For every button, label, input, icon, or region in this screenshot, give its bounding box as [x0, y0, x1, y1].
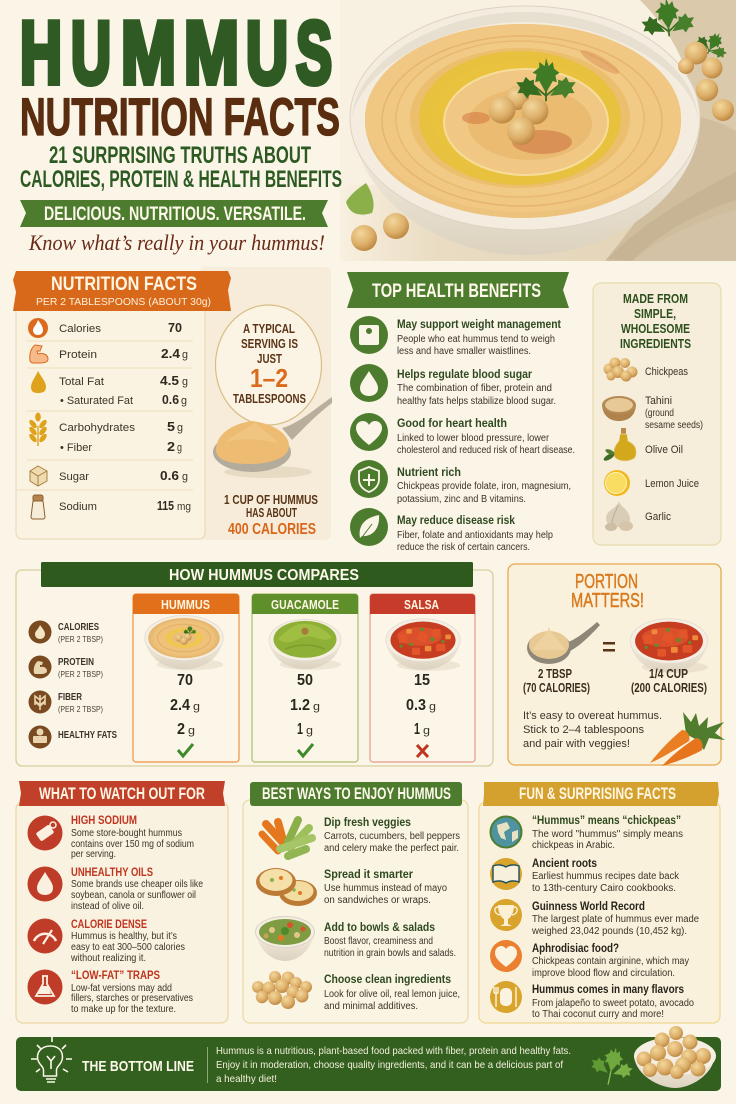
values: [406, 672, 436, 738]
advice text: [523, 710, 662, 750]
benefit: blood sugar: Helps regulate blood sugar: [397, 369, 532, 381]
heading: MADE FROM: [623, 291, 688, 306]
cloth napkin: [605, 117, 736, 261]
values: g: [313, 701, 320, 713]
warning: calorie dense: [28, 918, 185, 964]
heading: PORTION: [575, 571, 638, 593]
warning: low-fat traps: [28, 970, 193, 1015]
chickpeas on top: [488, 86, 548, 145]
callout: typical serving: TABLESPOONS: [233, 392, 306, 406]
amounts: (70 CALORIES): [523, 681, 590, 695]
row: sugar: [59, 468, 188, 483]
parsley sprig small: [693, 25, 734, 62]
label: healthy fats: HEALTHY FATS: [58, 730, 117, 741]
icon: wheat: [28, 412, 48, 446]
banner: HOW HUMMUS COMPARES: [169, 567, 359, 584]
panel: top health benefits: [347, 272, 575, 553]
values: 2: [177, 721, 185, 738]
subtitle: 21 SURPRISING TRUTHS ABOUT: [49, 142, 311, 169]
advice text: and pair with veggies!: [523, 738, 630, 750]
note: one cup has 400 calories: 400 CALORIES: [228, 521, 316, 538]
note: one cup has 400 calories: HAS ABOUT: [246, 506, 297, 520]
values: 2.4: [170, 697, 190, 714]
panel: portion matters: [508, 564, 725, 766]
green chickpea pod: [346, 183, 374, 215]
ingredient: garlic: [605, 501, 671, 531]
heading: INGREDIENTS: [620, 336, 691, 351]
banner: FUN & SURPRISING FACTS: [519, 785, 676, 803]
panel: best ways to enjoy hummus: [243, 782, 468, 1023]
panel: ingredients: [593, 283, 721, 545]
row: saturated fat: g: [181, 395, 187, 407]
subtitle: CALORIES, PROTEIN & HEALTH BENEFITS: [20, 166, 342, 193]
serving side panel background: [200, 267, 331, 540]
warning: unhealthy oils: Some brands use cheaper oils like: [71, 879, 203, 890]
banner: nutrition facts: [13, 271, 231, 311]
heading: SIMPLE,: [634, 306, 676, 321]
idea: spread: on sandwiches or wraps.: [324, 895, 431, 906]
fact: flavors: Hummus comes in many flavors: [532, 984, 684, 996]
row: sugar: 0.6: [160, 468, 179, 483]
warning: low-fat traps: Low-fat versions may add: [71, 983, 172, 994]
check mark: [298, 744, 313, 756]
fact: ancient roots: Earliest hummus recipes date back: [532, 871, 679, 882]
icon: muscle: [30, 345, 48, 363]
summary text: [207, 1045, 571, 1085]
warning: unhealthy oils: instead of olive oil.: [71, 901, 144, 912]
idea: bowls: [256, 916, 456, 961]
values: 1.2: [290, 697, 310, 714]
warning: low-fat traps: fillers, starches or preservatives: [71, 993, 193, 1004]
idea: veggies: and celery make the perfect pair.: [324, 843, 459, 854]
benefit: heart: cholesterol and reduced risk of heart disease.: [397, 445, 575, 456]
heading: THE BOTTOM LINE: [82, 1058, 194, 1075]
warning: low-fat traps: to make up for the texture.: [71, 1004, 176, 1015]
fact: flavors: From jalapeño to sweet potato, avocado: [532, 998, 695, 1009]
callout: typical serving: SERVING IS: [241, 337, 298, 351]
banner: [347, 272, 569, 308]
benefit: weight: People who eat hummus tend to weigh: [397, 334, 555, 345]
spoon: [527, 622, 600, 664]
values: [290, 672, 320, 738]
note: one cup has 400 calories: [224, 493, 318, 538]
nutrition table: [16, 300, 205, 539]
cross mark: [417, 745, 428, 757]
ingredient: chickpeas: [604, 358, 688, 382]
row: carbohydrates: [59, 419, 183, 434]
ingredient: tahini: [602, 395, 703, 431]
tagline: Know what’s really in your hummus!: [28, 230, 325, 255]
panel: what to watch out for: [16, 781, 228, 1023]
icon: sugar cube: [30, 466, 47, 486]
title: hummus: U: [71, 3, 111, 102]
row: protein: g: [182, 349, 188, 361]
label: fiber: [28, 690, 103, 714]
ingredient: tahini: Tahini: [645, 395, 672, 407]
title: hummus: [20, 3, 332, 102]
header: HUMMUS: [161, 597, 210, 612]
warning: unhealthy oils: [28, 866, 203, 912]
heading: [620, 291, 691, 351]
row: calories: 70: [168, 320, 182, 335]
hummus surface: [365, 24, 681, 218]
heading: WHOLESOME: [621, 321, 690, 336]
fact: world record: The largest plate of hummus ever made: [532, 914, 700, 925]
spoon with hummus: [213, 397, 332, 478]
benefit: nutrient: Nutrient rich: [397, 467, 461, 479]
label: fiber: (PER 2 TBSP): [58, 705, 103, 714]
banner: [19, 781, 225, 806]
idea: bowls: Add to bowls & salads: [324, 922, 435, 934]
row: fiber: g: [177, 442, 182, 454]
banner: [41, 562, 473, 587]
values: [170, 672, 200, 738]
benefit: heart: [350, 413, 575, 456]
ingredient: lemon: [604, 470, 699, 496]
ingredient: olive oil: [603, 428, 683, 462]
benefit: nutrient: Chickpeas provide folate, iron, magnesium,: [397, 481, 571, 492]
panel: fun and surprising facts: [479, 782, 720, 1023]
title: hummus: S: [296, 3, 332, 102]
warning: unhealthy oils: UNHEALTHY OILS: [71, 867, 153, 879]
fact: ancient roots: [490, 858, 679, 894]
ingredient: tahini: sesame seeds): [645, 420, 703, 431]
banner: [250, 782, 462, 806]
row: sodium: 115: [157, 498, 174, 513]
row labels: [28, 620, 117, 748]
row: total fat: 4.5: [160, 373, 179, 388]
icon: oil drop: [31, 371, 46, 393]
title: nutrition facts: NUTRITION FACTS: [20, 88, 340, 147]
benefit: heart: Linked to lower blood pressure, lower: [397, 433, 550, 444]
idea: ingredients: and minimal additives.: [324, 1001, 418, 1012]
label: calories: CALORIES: [58, 622, 99, 633]
warning: high sodium: HIGH SODIUM: [71, 815, 137, 827]
header: [252, 594, 358, 614]
row: fiber: [60, 439, 182, 454]
header: [370, 594, 475, 614]
amounts: (200 CALORIES): [631, 681, 707, 695]
benefit: heart: Good for heart health: [397, 418, 507, 430]
hero: bowl of hummus: [340, 0, 736, 261]
banner: TOP HEALTH BENEFITS: [372, 281, 541, 302]
title: hummus: H: [20, 3, 62, 102]
fact: aphrodisiac: [490, 940, 689, 979]
benefit: blood sugar: healthy fats helps stabilize blood sugar.: [397, 396, 556, 407]
icon: flame: [28, 318, 48, 338]
row: sodium: [59, 498, 191, 513]
label: protein: (PER 2 TBSP): [58, 670, 103, 679]
fact: ancient roots: Ancient roots: [532, 858, 597, 870]
values: 1: [297, 721, 303, 738]
subtitle: [20, 142, 342, 193]
fact: meaning: “Hummus” means “chickpeas”: [532, 815, 681, 827]
idea: veggies: [262, 817, 460, 856]
row: calories: [59, 320, 182, 335]
bowl image: [386, 619, 460, 671]
benefit: weight: less and have smaller waistlines.: [397, 346, 531, 357]
values: g: [306, 725, 313, 737]
idea: spread: [256, 868, 448, 906]
amounts: [523, 667, 707, 695]
ingredient: lemon: Lemon Juice: [645, 478, 699, 490]
heading: [571, 571, 644, 612]
summary text: Enjoy it in moderation, choose quality ingredients, and it can be a delicious part of: [216, 1059, 563, 1071]
benefit: disease risk: [350, 508, 554, 553]
summary text: Hummus is a nutritious, plant-based food packed with fiber, protein and healthy fats.: [216, 1045, 571, 1057]
warning: low-fat traps: “LOW-FAT” TRAPS: [71, 970, 160, 982]
heading: MATTERS!: [571, 590, 644, 612]
banner: [483, 782, 719, 806]
callout: typical serving: 1–2: [250, 363, 288, 393]
warning: high sodium: Some store-bought hummus: [71, 828, 182, 839]
row: carbohydrates: g: [177, 422, 183, 434]
benefit: disease risk: reduce the risk of certain cancers.: [397, 542, 530, 553]
salsa bowl: [630, 619, 708, 673]
row: sodium: mg: [177, 501, 191, 513]
scattered chickpeas: [351, 42, 734, 251]
idea: spread: Spread it smarter: [324, 869, 413, 881]
row: saturated fat: • Saturated Fat: [60, 395, 133, 407]
label: calories: (PER 2 TBSP): [58, 635, 103, 644]
ingredient: olive oil: Olive Oil: [645, 444, 683, 456]
panel: the bottom line: [16, 1026, 721, 1091]
summary text: a healthy diet!: [216, 1073, 277, 1085]
row: sodium: Sodium: [59, 501, 97, 513]
advice text: It’s easy to overeat hummus.: [523, 710, 662, 722]
column: salsa: [370, 594, 475, 762]
fact: meaning: chickpeas in Arabic.: [532, 840, 615, 851]
values: 50: [297, 672, 313, 689]
row: total fat: Total Fat: [59, 376, 104, 388]
ingredient: tahini: (ground: [645, 408, 674, 419]
label: protein: [28, 656, 103, 679]
banner: WHAT TO WATCH OUT FOR: [39, 785, 205, 803]
row: total fat: [59, 373, 188, 388]
panel: nutrition facts: [13, 267, 332, 540]
benefit: nutrient: [350, 460, 571, 505]
header: GUACAMOLE: [271, 597, 339, 612]
ingredient: garlic: Garlic: [645, 511, 671, 523]
row: sugar: Sugar: [59, 471, 89, 483]
amounts: 2 TBSP: [538, 667, 572, 681]
banner: nutrition facts: PER 2 TABLESPOONS (ABOUT 30g): [36, 296, 211, 308]
parsley sprig top right: [640, 0, 696, 39]
label: protein: PROTEIN: [58, 657, 94, 668]
values: 70: [177, 672, 193, 689]
idea: veggies: Dip fresh veggies: [324, 817, 411, 829]
icon: salt shaker: [31, 495, 45, 519]
idea: ingredients: Choose clean ingredients: [324, 974, 451, 986]
fact: meaning: The word "hummus" simply means: [532, 829, 683, 840]
ingredient: chickpeas: Chickpeas: [645, 366, 688, 378]
row: sugar: g: [182, 471, 188, 483]
fact: flavors: [490, 981, 695, 1020]
fact: aphrodisiac: Chickpeas contain arginine, which may: [532, 956, 689, 967]
title: hummus: M: [121, 3, 176, 102]
benefit: weight: [350, 316, 561, 357]
title: hummus: M: [184, 3, 239, 102]
row: fiber: 2: [167, 439, 175, 454]
fact: world record: Guinness World Record: [532, 901, 645, 913]
warning: calorie dense: easy to eat 300–500 calories: [71, 942, 185, 953]
row: protein: Protein: [59, 349, 97, 361]
label: calories: [28, 620, 103, 644]
warning: high sodium: [28, 815, 194, 860]
warning: high sodium: contains over 150 mg of sodium: [71, 839, 194, 850]
fact: meaning: [490, 815, 683, 851]
warning: calorie dense: Hummus is healthy, but it’s: [71, 931, 177, 942]
benefit: disease risk: Fiber, folate and antioxidants may help: [397, 530, 554, 541]
row: fiber: • Fiber: [60, 442, 92, 454]
bowl image: [269, 620, 341, 670]
values: 0.3: [406, 697, 426, 714]
icon: carrots: [650, 712, 725, 766]
fact: flavors: to Thai coconut curry and more!: [532, 1009, 664, 1020]
banner: nutrition facts: NUTRITION FACTS: [51, 274, 197, 295]
header: [133, 594, 239, 614]
row: carbohydrates: 5: [167, 419, 175, 434]
benefit: blood sugar: [350, 364, 556, 407]
row: protein: 2.4: [161, 346, 181, 361]
values: g: [193, 701, 200, 713]
values: g: [188, 725, 195, 737]
ribbon: delicious nutritious versatile: [20, 200, 328, 227]
note: one cup has 400 calories: 1 CUP OF HUMMUS: [224, 493, 318, 507]
benefit: weight: May support weight management: [397, 319, 561, 331]
panel: how hummus compares: [16, 562, 493, 766]
values: 15: [414, 672, 430, 689]
idea: ingredients: [252, 971, 460, 1012]
label: fiber: FIBER: [58, 692, 83, 703]
row: saturated fat: [60, 392, 187, 407]
fact: ancient roots: to 13th-century Cairo cookbooks.: [532, 883, 676, 894]
icon: light bulb: [31, 1036, 72, 1082]
idea: veggies: Carrots, cucumbers, bell peppers: [324, 831, 460, 842]
bowl of chickpeas: [634, 1026, 716, 1088]
column: hummus: [133, 594, 239, 762]
row: saturated fat: 0.6: [162, 392, 179, 407]
row: calories: Calories: [59, 323, 102, 335]
parsley garnish: [516, 58, 576, 101]
header: SALSA: [404, 597, 439, 612]
idea: spread: Use hummus instead of mayo: [324, 883, 448, 894]
values: g: [423, 725, 430, 737]
benefit: disease risk: May reduce disease risk: [397, 515, 516, 527]
banner: BEST WAYS TO ENJOY HUMMUS: [262, 785, 451, 803]
fact: aphrodisiac: Aphrodisiac food?: [532, 943, 619, 955]
column: guacamole: [252, 594, 358, 762]
check mark: [178, 744, 193, 756]
callout: typical serving: JUST: [257, 352, 282, 366]
row: protein: [59, 346, 188, 361]
advice text: Stick to 2–4 tablespoons: [523, 724, 645, 736]
callout: typical serving: A TYPICAL: [243, 322, 295, 336]
equals sign: [603, 642, 615, 652]
ribbon: delicious nutritious versatile: DELICIOUS. NUTRITIOUS. VERSATILE.: [44, 204, 306, 225]
bowl image: [145, 616, 223, 670]
fact: world record: [490, 899, 700, 937]
fact: world record: weighed 23,042 pounds (10,452 kg).: [531, 926, 687, 937]
warning: calorie dense: CALORIE DENSE: [71, 919, 147, 931]
benefit: blood sugar: The combination of fiber, protein and: [397, 383, 552, 394]
warning: calorie dense: without realizing it.: [70, 953, 146, 964]
idea: bowls: Boost flavor, creaminess and: [324, 936, 433, 947]
callout: typical serving: [216, 305, 322, 425]
row: total fat: g: [182, 376, 188, 388]
values: g: [429, 701, 436, 713]
title: hummus: U: [246, 3, 288, 102]
parsley: [588, 1043, 636, 1089]
values: 1: [414, 721, 420, 738]
fact: aphrodisiac: improve blood flow and circulation.: [532, 968, 675, 979]
row: carbohydrates: Carbohydrates: [59, 422, 136, 434]
idea: ingredients: Look for olive oil, real lemon juice,: [324, 989, 460, 1000]
idea: bowls: nutrition in grain bowls and salads.: [324, 948, 456, 959]
warning: unhealthy oils: soybean, canola or sunflower oil: [71, 890, 196, 901]
warning: high sodium: per serving.: [71, 849, 116, 860]
bowl: [350, 6, 700, 255]
amounts: 1/4 CUP: [649, 667, 688, 681]
benefit: nutrient: potassium, zinc and B vitamins.: [397, 494, 526, 505]
